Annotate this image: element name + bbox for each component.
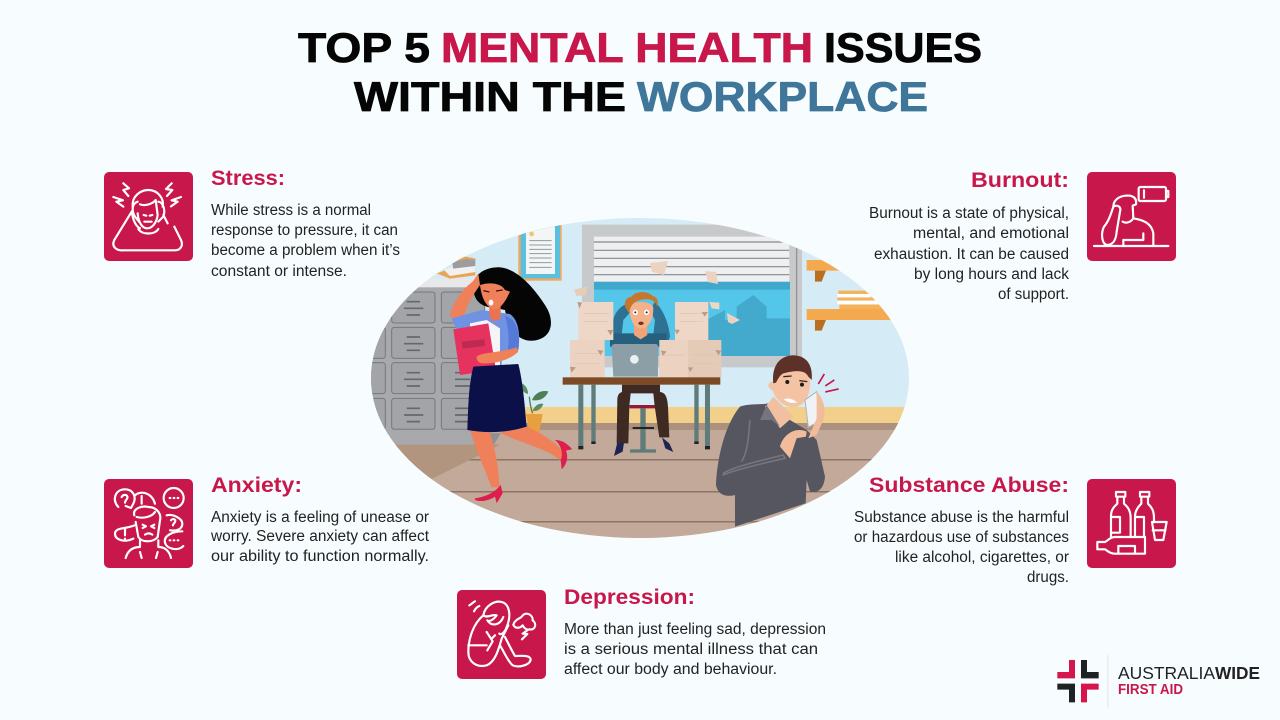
- text: stress: [211, 202, 400, 280]
- text: substance abuse: Substance abuse is the harmful: [854, 509, 1069, 526]
- logo wordmark: AUSTRALIA: [1118, 663, 1215, 683]
- panel: substance abuse: [854, 473, 1176, 586]
- logo: Australia Wide First Aid: [1057, 655, 1260, 708]
- face: [768, 371, 810, 408]
- heading: stress: Stress:: [211, 166, 285, 190]
- text: substance abuse: drugs.: [1027, 569, 1069, 586]
- ringing marks: [818, 374, 839, 392]
- panel: anxiety: [104, 473, 430, 568]
- text: burnout: Burnout is a state of physical,: [869, 205, 1069, 222]
- text: depression: is a serious mental illness that can: [564, 641, 818, 658]
- back leg: [500, 427, 565, 460]
- wall frame poster: [518, 220, 562, 281]
- panel: stress: [104, 166, 400, 280]
- title: ISSUES: [824, 24, 982, 71]
- filing cabinet: [371, 278, 500, 478]
- man on phone: [716, 355, 839, 527]
- flying papers: [650, 261, 740, 324]
- icon: bottles and glass: [1087, 479, 1176, 568]
- text: anxiety: Anxiety is a feeling of unease or: [211, 509, 429, 526]
- text: stress: constant or intense.: [211, 263, 347, 280]
- title: WORKPLACE: [637, 73, 928, 120]
- face: [489, 303, 501, 322]
- skirt: [467, 364, 527, 432]
- stressed woman with folder: [450, 267, 572, 503]
- text: burnout: by long hours and lack: [914, 266, 1069, 283]
- panel: depression: [457, 585, 826, 679]
- panel: burnout: [869, 168, 1176, 303]
- heading: burnout: Burnout:: [971, 168, 1069, 192]
- text: depression: affect our body and behaviour.: [564, 661, 777, 678]
- blouse: [452, 310, 519, 367]
- heading: substance abuse: Substance Abuse:: [869, 473, 1069, 497]
- text: burnout: [869, 205, 1069, 303]
- laptop: [612, 344, 658, 377]
- worker legs: [617, 385, 669, 443]
- window with blinds: [582, 225, 802, 367]
- icon: anxious person with thought bubbles: [104, 479, 193, 568]
- text: anxiety: [210, 509, 430, 565]
- text: anxiety: our ability to function normally.: [211, 548, 429, 565]
- icon: stressed person: [104, 172, 193, 261]
- chair: [629, 405, 656, 408]
- text: burnout: mental, and emotional: [913, 225, 1069, 242]
- papers behind folder: [470, 320, 500, 377]
- folder: [453, 323, 496, 375]
- plant: [521, 383, 548, 433]
- text: burnout: of support.: [998, 286, 1069, 303]
- phone: [804, 390, 818, 428]
- front leg: [470, 430, 499, 487]
- text: substance abuse: or hazardous use of substances: [854, 529, 1069, 546]
- text: stress: response to pressure, it can: [211, 222, 398, 239]
- shoes: [475, 485, 503, 503]
- title: TOP 5: [298, 24, 430, 71]
- skirting and floor: [360, 407, 920, 543]
- raised arm: [450, 273, 480, 322]
- icon: depressed person hugging knees: [457, 590, 546, 679]
- collar and neck: [765, 397, 793, 428]
- logo: Australia Wide First Aid: FIRST AID: [1118, 682, 1183, 698]
- text: substance abuse: like alcohol, cigarettes, or: [895, 549, 1069, 566]
- title: WITHIN THE: [354, 73, 626, 120]
- central office illustration: [350, 210, 920, 543]
- text: stress: become a problem when it’s: [211, 242, 400, 259]
- forearm and hand: [477, 347, 518, 363]
- books on cabinet: [437, 257, 475, 279]
- wall: [360, 210, 920, 410]
- hands: [808, 392, 825, 438]
- shelves and books: [807, 260, 900, 331]
- text: stress: While stress is a normal: [211, 202, 371, 219]
- title: [298, 24, 982, 120]
- title: MENTAL HEALTH: [441, 24, 813, 71]
- text: depression: More than just feeling sad, depression: [564, 621, 826, 638]
- paper stacks: [570, 340, 605, 377]
- desk: [563, 377, 720, 385]
- hair: [473, 267, 551, 341]
- icon: burnout person with low battery: [1087, 172, 1176, 261]
- text: substance abuse: [854, 509, 1069, 586]
- logo: Australia Wide First Aid: WIDE: [1215, 663, 1260, 683]
- burnt-out worker at desk: [563, 286, 721, 456]
- text: depression: [564, 621, 826, 678]
- logo mark: [1057, 655, 1108, 708]
- sweater: [716, 403, 825, 527]
- text: burnout: exhaustion. It can be caused: [874, 246, 1069, 263]
- worker face: [629, 302, 653, 328]
- text: anxiety: worry. Severe anxiety can affect: [210, 528, 430, 545]
- heading: anxiety: Anxiety:: [211, 473, 302, 497]
- heading: depression: Depression:: [564, 585, 695, 609]
- worker arms and torso: [610, 302, 670, 347]
